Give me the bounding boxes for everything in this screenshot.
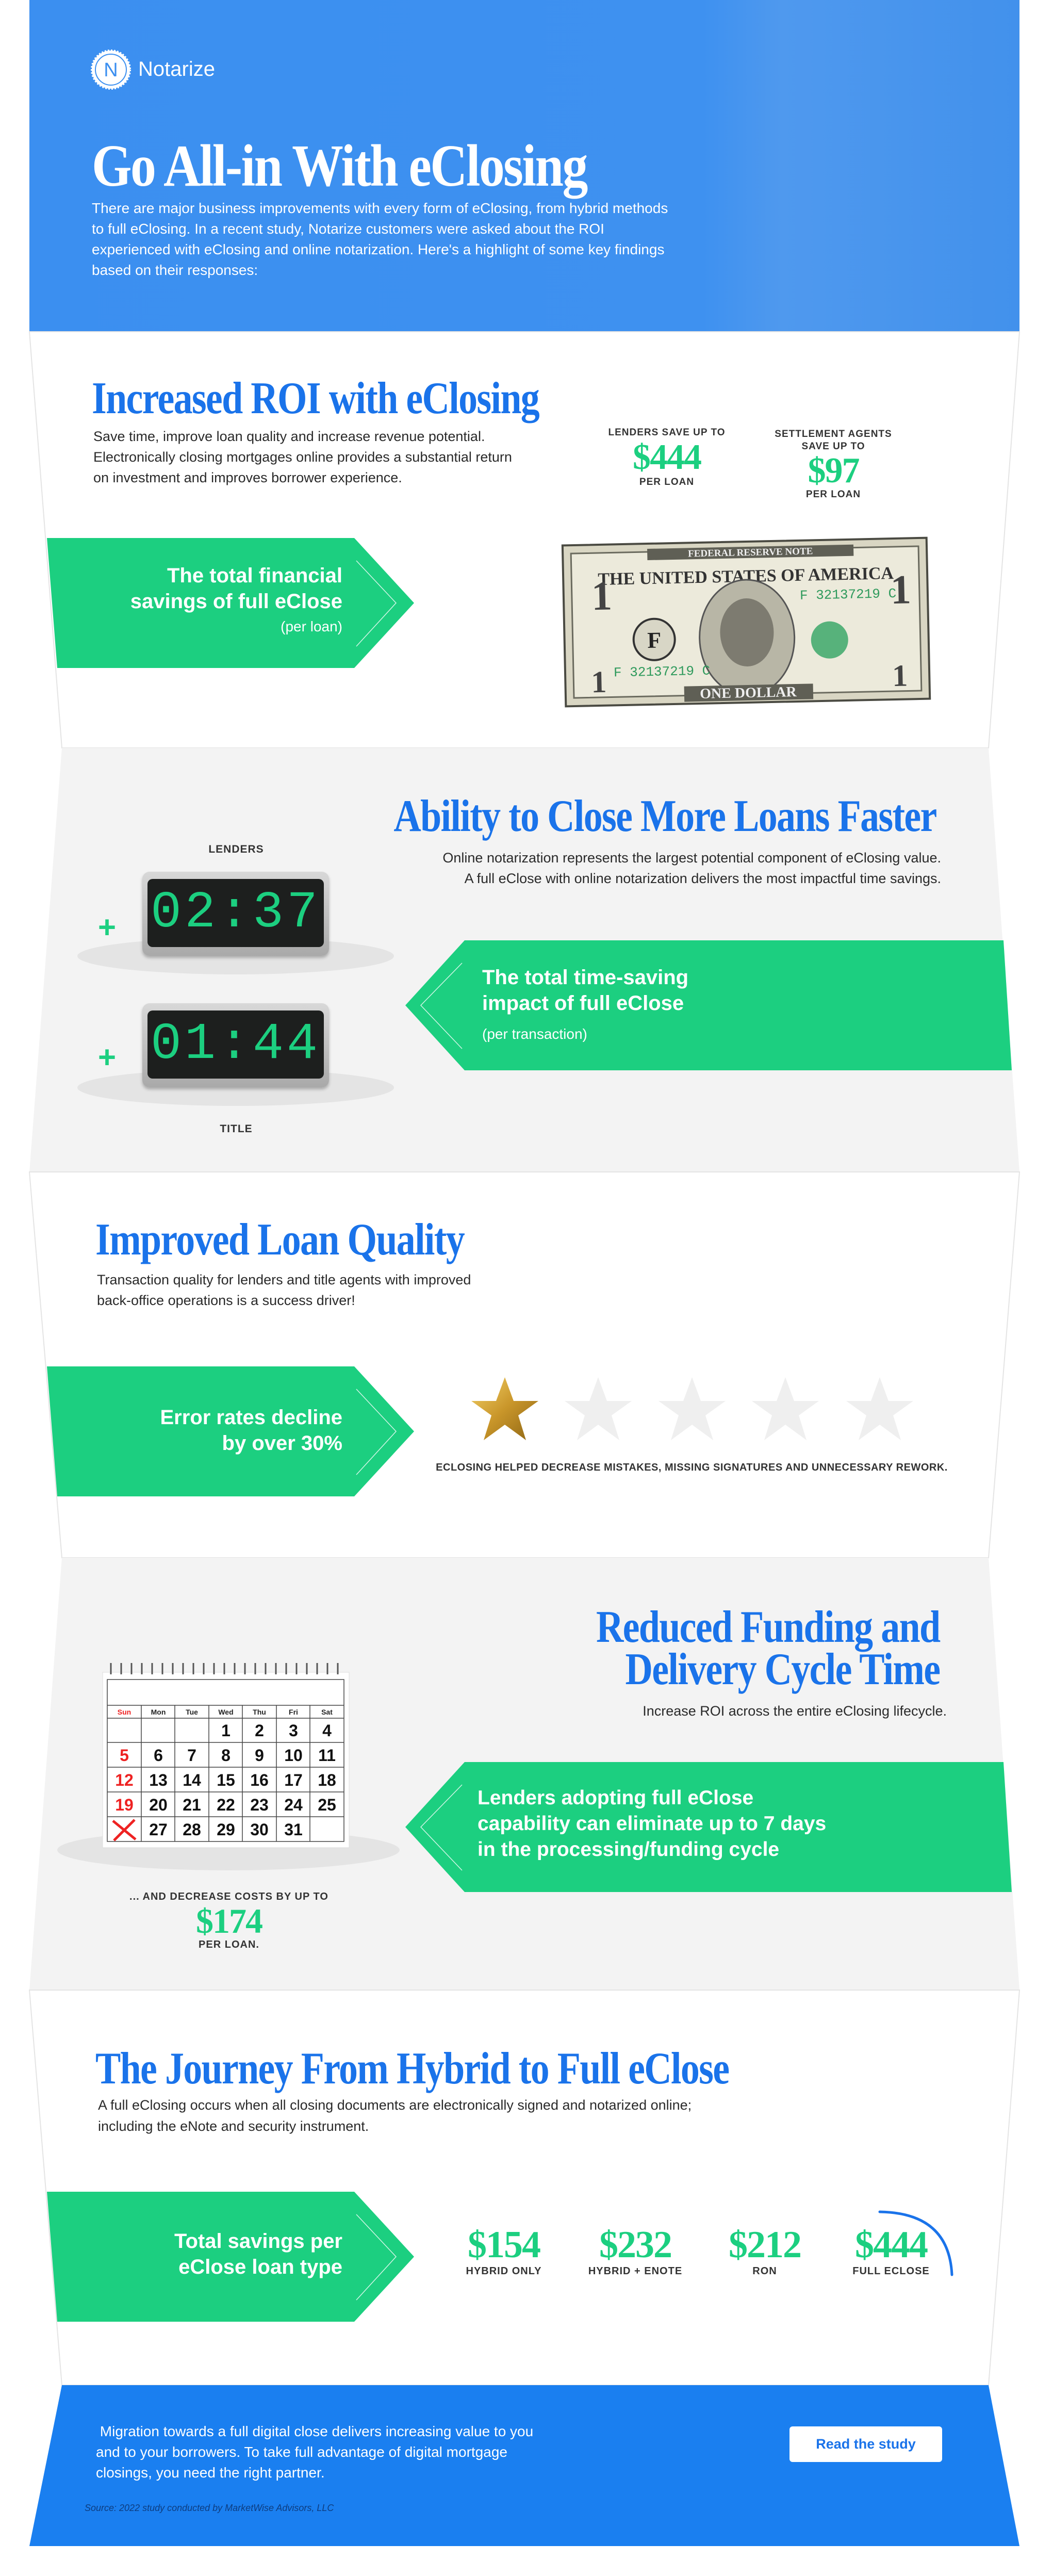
calendar: 15 xyxy=(217,1771,235,1789)
calendar: 9 xyxy=(255,1746,264,1765)
star rating xyxy=(471,1377,913,1440)
arc highlight xyxy=(879,2211,953,2276)
calendar: 13 xyxy=(149,1771,168,1789)
calendar: 20 xyxy=(149,1796,168,1814)
calendar: Wed xyxy=(218,1708,234,1716)
icon: notarize seal xyxy=(91,50,131,90)
banner: total financial savings: savings of full eClose xyxy=(130,590,342,613)
banner: total financial savings xyxy=(47,538,414,668)
title: Go All-in With eClosing xyxy=(92,133,587,199)
label: title: TITLE xyxy=(220,1123,253,1135)
clock: lenders 02:37 xyxy=(77,872,394,974)
clock: title 01:44 xyxy=(77,1003,394,1106)
image: dollar bill: F 32137219 C xyxy=(800,586,896,604)
image: dollar bill: F 32137219 C xyxy=(614,663,711,680)
savings: full eclose: $444 xyxy=(855,2224,927,2266)
banner: total time-saving impact: The total time-saving xyxy=(482,966,688,989)
image: dollar bill: 1 xyxy=(892,658,908,693)
button: read the study xyxy=(789,2426,942,2462)
calendar: 29 xyxy=(217,1820,235,1839)
calendar: 7 xyxy=(187,1746,196,1765)
clock: title 01:44: 01:44 xyxy=(151,1016,321,1074)
section 5 body xyxy=(98,2097,692,2134)
calendar: 18 xyxy=(318,1771,336,1789)
section 4 heading xyxy=(596,1602,941,1694)
image: dollar bill xyxy=(561,536,931,708)
section 5 body: A full eClosing occurs when all closing documents are electronically signed and notarized online; xyxy=(98,2097,692,2113)
intro text: to full eClosing. In a recent study, Notarize customers were asked about the ROI xyxy=(92,221,604,237)
banner: lenders adopting full eClose: capability can eliminate up to 7 days xyxy=(478,1813,826,1835)
calendar: 10 xyxy=(284,1746,303,1765)
star caption: ECLOSING HELPED DECREASE MISTAKES, MISSING SIGNATURES AND UNNECESSARY REWORK. xyxy=(436,1462,948,1473)
calendar: 5 xyxy=(120,1746,129,1765)
stat: settlement agents save: SETTLEMENT AGENTS xyxy=(775,429,892,439)
calendar: 2 xyxy=(255,1721,264,1740)
image: dollar bill: 1 xyxy=(591,573,613,619)
stat: settlement agents save xyxy=(775,429,892,500)
icon: notarize seal: N xyxy=(104,59,118,81)
banner: error rates decline xyxy=(47,1366,414,1496)
stat: decrease costs $174: PER LOAN. xyxy=(199,1939,259,1950)
banner: lenders adopting full eClose: in the processing/funding cycle xyxy=(478,1838,779,1861)
stat: settlement agents save: $97 xyxy=(808,451,859,491)
stat: decrease costs $174: $174 xyxy=(196,1901,262,1941)
savings: RON: RON xyxy=(752,2265,777,2277)
calendar: 24 xyxy=(284,1796,303,1814)
calendar xyxy=(57,1663,400,1870)
image: dollar bill: FEDERAL RESERVE NOTE xyxy=(688,546,813,559)
savings: hybrid only: $154 xyxy=(468,2224,540,2266)
section 1 body xyxy=(93,429,512,485)
calendar: Sun xyxy=(118,1708,131,1716)
banner: error rates decline: by over 30% xyxy=(222,1432,342,1455)
calendar: 28 xyxy=(183,1820,201,1839)
image: dollar bill: THE UNITED STATES OF AMERICA xyxy=(598,564,894,589)
stat: lenders save: LENDERS SAVE UP TO xyxy=(608,427,726,438)
banner: error rates decline: Error rates decline xyxy=(160,1406,342,1429)
calendar: 31 xyxy=(284,1820,303,1839)
banner: total time-saving impact xyxy=(405,940,1012,1070)
footer text: and to your borrowers. To take full advantage of digital mortgage xyxy=(96,2444,507,2460)
calendar: 22 xyxy=(217,1796,235,1814)
calendar: 27 xyxy=(149,1820,168,1839)
intro text: based on their responses: xyxy=(92,262,258,278)
image: dollar bill: F xyxy=(647,627,662,653)
banner: total savings per loan type: Total savings per xyxy=(174,2230,342,2253)
banner: total financial savings: The total financial xyxy=(167,564,342,587)
section 4 heading: Delivery Cycle Time xyxy=(625,1644,940,1694)
intro text xyxy=(92,200,668,278)
stat: lenders save: $444 xyxy=(633,437,701,477)
calendar: 17 xyxy=(284,1771,303,1789)
section 2 body: Online notarization represents the largest potential component of eClosing value. xyxy=(442,850,941,866)
calendar: 6 xyxy=(154,1746,163,1765)
banner: total time-saving impact: impact of full eClose xyxy=(482,992,684,1015)
calendar: 19 xyxy=(115,1796,134,1814)
intro text: There are major business improvements with every form of eClosing, from hybrid methods xyxy=(92,200,668,216)
stat: decrease costs $174: ... AND DECREASE COSTS BY UP TO xyxy=(129,1891,328,1902)
calendar: 21 xyxy=(183,1796,201,1814)
calendar: 4 xyxy=(322,1721,332,1740)
source note: Source: 2022 study conducted by MarketWise Advisors, LLC xyxy=(85,2503,334,2513)
section 1 heading: Increased ROI with eClosing xyxy=(92,373,539,423)
calendar: Mon xyxy=(151,1708,166,1716)
clock: lenders 02:37: 02:37 xyxy=(151,884,321,942)
calendar: Sat xyxy=(321,1708,333,1716)
banner: lenders adopting full eClose xyxy=(405,1762,1012,1892)
button: read the study: Read the study xyxy=(816,2436,916,2452)
section 3 body: Transaction quality for lenders and title agents with improved xyxy=(97,1272,471,1287)
banner: lenders adopting full eClose: Lenders adopting full eClose xyxy=(478,1787,753,1809)
banner: total savings per loan type: eClose loan type xyxy=(178,2256,342,2278)
savings: full eclose: FULL ECLOSE xyxy=(852,2265,930,2277)
calendar: 8 xyxy=(221,1746,231,1765)
calendar: 30 xyxy=(250,1820,269,1839)
calendar: 16 xyxy=(250,1771,269,1789)
savings: hybrid + enote: $232 xyxy=(599,2224,671,2266)
stat: settlement agents save: SAVE UP TO xyxy=(801,441,865,452)
section 5 body: including the eNote and security instrument. xyxy=(98,2118,369,2134)
savings: hybrid + enote: HYBRID + ENOTE xyxy=(588,2265,682,2277)
logo xyxy=(91,50,215,90)
footer text: Migration towards a full digital close delivers increasing value to you xyxy=(100,2423,533,2439)
section 1 body: Electronically closing mortgages online provides a substantial return xyxy=(93,449,512,465)
section 4 heading: Reduced Funding and xyxy=(596,1602,940,1652)
calendar: 11 xyxy=(318,1746,336,1765)
section 2 body xyxy=(442,850,941,886)
image: dollar bill: 1 xyxy=(890,567,912,613)
calendar: Tue xyxy=(186,1708,198,1716)
logo text: Notarize xyxy=(138,58,215,80)
image: dollar bill: 1 xyxy=(591,665,607,699)
savings: hybrid only: HYBRID ONLY xyxy=(466,2265,541,2277)
banner: total financial savings: (per loan) xyxy=(281,618,342,634)
stat: settlement agents save: PER LOAN xyxy=(806,489,861,500)
section 2 heading: Ability to Close More Loans Faster xyxy=(394,791,936,841)
section 4 body: Increase ROI across the entire eClosing lifecycle. xyxy=(643,1703,947,1719)
section 3 body: back-office operations is a success driver! xyxy=(97,1293,355,1308)
calendar: 23 xyxy=(250,1796,269,1814)
footer text: closings, you need the right partner. xyxy=(96,2465,325,2481)
clock: title 01:44: + xyxy=(98,1040,116,1074)
savings: hybrid + enote xyxy=(588,2224,682,2277)
footer text xyxy=(96,2423,533,2481)
section 1 body: Save time, improve loan quality and increase revenue potential. xyxy=(93,429,485,444)
calendar: Thu xyxy=(253,1708,266,1716)
banner: total savings per loan type xyxy=(47,2192,414,2322)
calendar: 3 xyxy=(289,1721,298,1740)
image: dollar bill: ONE DOLLAR xyxy=(700,684,797,702)
section 3 body xyxy=(97,1272,471,1308)
section 2 body: A full eClose with online notarization delivers the most impactful time savings. xyxy=(465,871,941,886)
stat: lenders save xyxy=(608,427,726,487)
stat: decrease costs $174 xyxy=(129,1891,328,1950)
section 1 body: on investment and improves borrower experience. xyxy=(93,470,402,485)
calendar: 1 xyxy=(221,1721,231,1740)
clock: lenders 02:37: + xyxy=(98,910,116,944)
stat: lenders save: PER LOAN xyxy=(639,477,694,487)
calendar: Fri xyxy=(289,1708,298,1716)
label: lenders: LENDERS xyxy=(208,843,264,855)
banner: total time-saving impact: (per transaction) xyxy=(482,1026,587,1042)
calendar: 25 xyxy=(318,1796,336,1814)
savings: RON: $212 xyxy=(729,2224,801,2266)
section 5 heading: The Journey From Hybrid to Full eClose xyxy=(95,2044,729,2094)
calendar: 14 xyxy=(183,1771,201,1789)
intro text: experienced with eClosing and online notarization. Here's a highlight of some key findings xyxy=(92,241,664,257)
calendar: 12 xyxy=(115,1771,134,1789)
section 3 heading: Improved Loan Quality xyxy=(95,1215,464,1265)
